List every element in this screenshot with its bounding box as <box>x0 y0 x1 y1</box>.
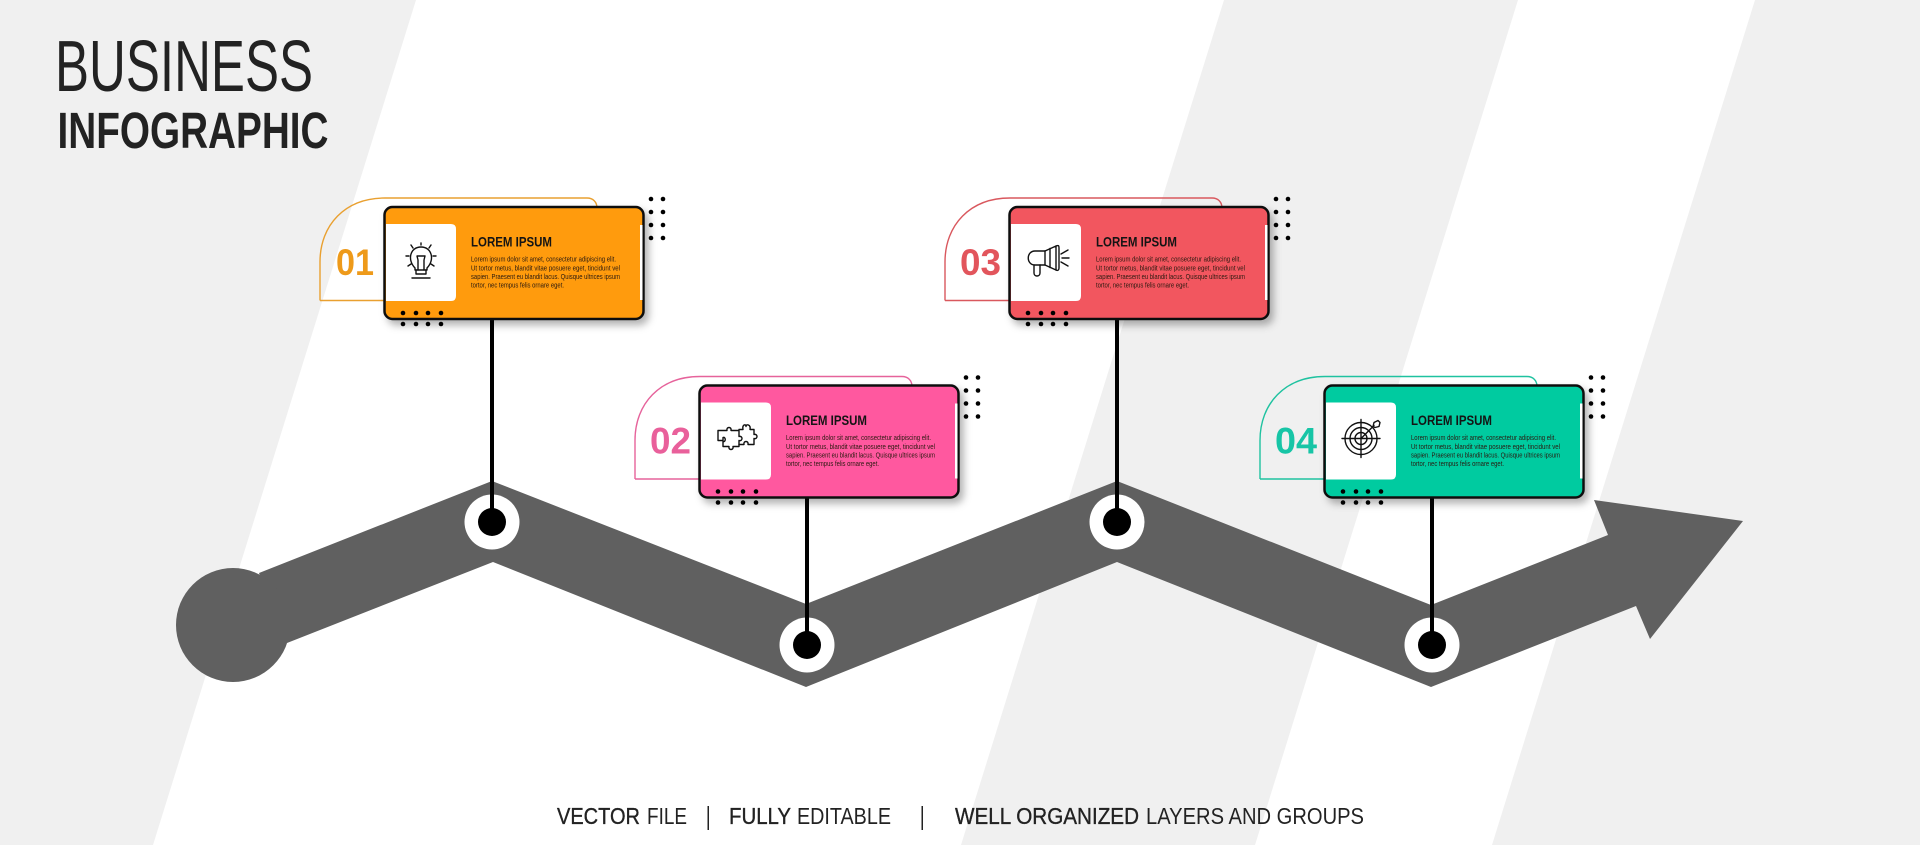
body text: Ut tortor metus, blandit vitae posuere eget, tincidunt vel <box>471 264 620 272</box>
footer tagline: FULLY <box>729 803 791 829</box>
footer tagline: LAYERS AND GROUPS <box>1146 803 1364 829</box>
dot patterns <box>716 375 980 505</box>
footer tagline: WELL ORGANIZED <box>955 803 1139 829</box>
step number 02: 02 <box>650 420 691 462</box>
body text: Lorem ipsum dolor sit amet, consectetur adipiscing elit. <box>1096 254 1241 264</box>
body text <box>786 433 935 468</box>
heading: LOREM IPSUM <box>786 412 867 428</box>
dot patterns <box>401 197 665 326</box>
body text <box>1411 433 1560 468</box>
panel: step 04 <box>1260 375 1605 505</box>
timeline node 4 <box>1404 497 1460 672</box>
body text: tortor, nec tempus felis ornare eget. <box>471 280 564 290</box>
body text: Lorem ipsum dolor sit amet, consectetur adipiscing elit. <box>786 433 931 442</box>
heading: LOREM IPSUM <box>471 234 552 250</box>
dot patterns <box>1026 197 1290 326</box>
body text: sapien. Praesent eu blandit lacus. Quisque ultrices ipsum <box>1411 450 1560 460</box>
body text: tortor, nec tempus felis ornare eget. <box>786 459 879 468</box>
timeline node 2 <box>780 497 834 672</box>
step number 01: 01 <box>336 242 374 283</box>
title: BUSINESS <box>55 27 313 107</box>
body text: tortor, nec tempus felis ornare eget. <box>1096 280 1189 290</box>
step number 03: 03 <box>960 242 1001 283</box>
body text: sapien. Praesent eu blandit lacus. Quisque ultrices ipsum <box>786 450 935 460</box>
body text: sapien. Praesent eu blandit lacus. Quisque ultrices ipsum <box>471 272 620 281</box>
timeline node 1 <box>464 318 520 550</box>
body text <box>1096 254 1245 290</box>
title <box>55 27 328 159</box>
dot patterns <box>1341 375 1605 505</box>
heading: LOREM IPSUM <box>1096 234 1177 250</box>
body text: Ut tortor metus, blandit vitae posuere eget, tincidunt vel <box>786 442 935 451</box>
footer tagline <box>557 803 1364 830</box>
body text <box>471 254 620 290</box>
heading: LOREM IPSUM <box>1411 412 1492 428</box>
arrow path <box>176 481 1743 687</box>
icon: megaphone <box>1028 246 1069 276</box>
icon: puzzle <box>718 425 757 450</box>
icon: light bulb <box>406 243 436 278</box>
footer tagline: VECTOR <box>557 803 640 829</box>
panel: step 01 <box>320 197 665 326</box>
panel: step 03 <box>945 197 1290 326</box>
step number 04: 04 <box>1275 420 1317 462</box>
body text: sapien. Praesent eu blandit lacus. Quisque ultrices ipsum <box>1096 272 1245 281</box>
body text: tortor, nec tempus felis ornare eget. <box>1411 459 1504 468</box>
footer tagline: EDITABLE <box>797 803 891 829</box>
body text: Lorem ipsum dolor sit amet, consectetur adipiscing elit. <box>1411 433 1556 442</box>
title: INFOGRAPHIC <box>58 102 328 159</box>
timeline node 3 <box>1090 318 1144 550</box>
body text: Ut tortor metus, blandit vitae posuere eget, tincidunt vel <box>1411 442 1560 451</box>
icon: target <box>1342 420 1380 458</box>
panel: step 02 <box>635 375 980 505</box>
footer tagline: FILE <box>647 803 687 829</box>
body text: Lorem ipsum dolor sit amet, consectetur adipiscing elit. <box>471 254 616 264</box>
body text: Ut tortor metus, blandit vitae posuere eget, tincidunt vel <box>1096 264 1245 272</box>
